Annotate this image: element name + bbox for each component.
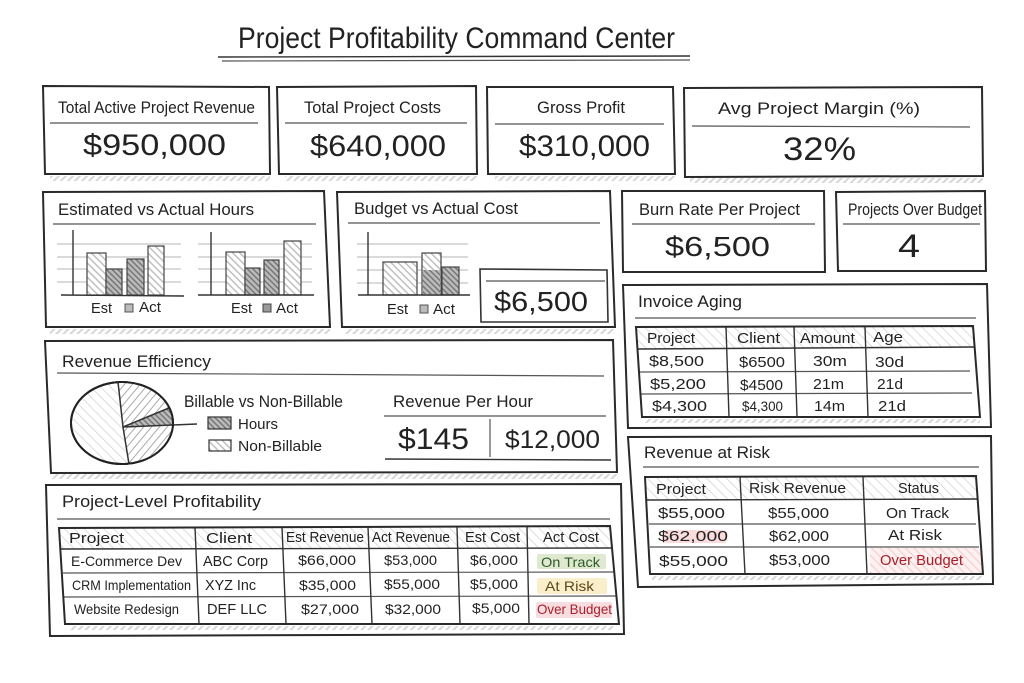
bar chart: budget: Est <box>387 301 409 318</box>
table: project profitability <box>59 526 619 630</box>
legend: Billable vs Non-Billable <box>184 392 343 411</box>
revenue per hour <box>384 392 611 460</box>
table: invoice aging: 30m <box>813 353 847 370</box>
table: invoice aging: Age <box>873 329 903 346</box>
table: project profitability: Project <box>69 530 125 547</box>
table: project profitability: $35,000 <box>299 577 356 593</box>
revenue per hour: Revenue Per Hour <box>393 392 533 411</box>
value: $6,500 <box>665 231 770 262</box>
table: project profitability: $6,000 <box>470 552 518 568</box>
table: revenue at risk: $55,000 <box>658 505 725 522</box>
table: invoice aging: $4500 <box>740 377 783 394</box>
panel: revenue efficiency <box>45 340 618 479</box>
table: invoice aging: 14m <box>814 398 845 415</box>
table: invoice aging <box>636 326 980 423</box>
table: invoice aging: $5,200 <box>650 376 706 393</box>
bar chart: budget: Act <box>433 301 456 318</box>
heading: Gross Profit <box>537 98 625 117</box>
table: project profitability: $66,000 <box>298 552 356 568</box>
heading: Project-Level Profitability <box>62 492 262 511</box>
table: invoice aging: $8,500 <box>649 353 704 370</box>
table: project profitability: Act Cost <box>543 529 600 546</box>
panel: invoice aging <box>623 284 991 428</box>
revenue per hour: $145 <box>398 423 469 456</box>
heading: Avg Project Margin (%) <box>718 99 920 118</box>
table: revenue at risk: $62,000 <box>769 528 829 545</box>
table: project profitability: E-Commerce Dev <box>71 553 182 569</box>
panel: estimated vs actual hours <box>43 191 330 334</box>
table: invoice aging: Project <box>647 330 696 347</box>
bar chart: hours left: Act <box>139 299 162 316</box>
panel: projects over budget <box>836 191 986 271</box>
table: project profitability: ABC Corp <box>203 553 268 570</box>
panel: average project margin <box>684 87 983 183</box>
title: Project Profitability Command Center <box>238 22 675 55</box>
table: revenue at risk: $55,000 <box>768 505 829 522</box>
bar chart: hours left <box>57 230 184 317</box>
legend: Hours <box>238 416 278 433</box>
heading: Invoice Aging <box>638 292 742 311</box>
table: project profitability: DEF LLC <box>207 601 267 618</box>
table: project profitability: Website Redesign <box>74 601 179 617</box>
table: revenue at risk: Status <box>898 480 939 497</box>
panel: revenue at risk <box>628 436 993 587</box>
table: invoice aging: Amount <box>800 330 856 347</box>
status badge: at risk <box>537 578 607 594</box>
table: revenue at risk: Project <box>656 481 707 498</box>
table: project profitability: $27,000 <box>301 601 359 617</box>
panel: total project costs <box>277 86 477 181</box>
heading: Revenue Efficiency <box>62 352 212 371</box>
panel: total active project revenue <box>43 86 270 181</box>
legend <box>184 392 343 455</box>
value: 4 <box>898 228 920 264</box>
table: invoice aging: 21d <box>877 376 903 393</box>
table: invoice aging: Client <box>737 330 781 347</box>
table: invoice aging: $4,300 <box>742 398 783 414</box>
table: invoice aging: $6500 <box>739 354 785 371</box>
value: $950,000 <box>83 129 226 162</box>
table: invoice aging: $4,300 <box>652 398 707 415</box>
table: project profitability: XYZ Inc <box>205 577 256 594</box>
value: 32% <box>783 131 856 167</box>
heading: Total Project Costs <box>304 98 441 117</box>
table: revenue at risk: At Risk <box>888 527 943 544</box>
bar chart: hours right <box>198 232 314 317</box>
status badge: over budget: Over Budget <box>537 601 612 617</box>
heading: Estimated vs Actual Hours <box>58 200 254 219</box>
table: invoice aging: 30d <box>875 354 904 371</box>
table: project profitability: $32,000 <box>385 601 441 617</box>
heading: Total Active Project Revenue <box>58 98 255 117</box>
table: project profitability: Est Cost <box>465 529 521 546</box>
table: revenue at risk <box>645 476 983 580</box>
callout: budget value: $6,500 <box>494 286 588 317</box>
table: revenue at risk: $53,000 <box>769 552 830 569</box>
table: project profitability: $5,000 <box>470 576 518 592</box>
table: project profitability: Client <box>206 530 253 547</box>
table: project profitability: Est Revenue <box>286 529 364 546</box>
panel: burn rate per project <box>622 191 825 272</box>
table: revenue at risk: Risk Revenue <box>749 480 846 497</box>
table: invoice aging: 21d <box>878 398 906 415</box>
table: revenue at risk: Over Budget <box>880 552 964 569</box>
bar chart: hours right: Act <box>276 300 299 317</box>
value: $310,000 <box>519 130 650 163</box>
table: revenue at risk: $55,000 <box>659 553 728 570</box>
table: project profitability: CRM Implementation <box>72 577 191 593</box>
table: invoice aging: 21m <box>813 376 844 393</box>
pie chart <box>71 382 197 464</box>
bar chart: hours left: Est <box>91 300 113 317</box>
callout: budget value <box>480 269 608 322</box>
status badge: at risk: At Risk <box>545 578 595 594</box>
panel: budget vs actual cost <box>337 191 615 334</box>
table: project profitability: $55,000 <box>384 576 440 592</box>
revenue per hour: $12,000 <box>505 426 600 454</box>
table: project profitability: Act Revenue <box>372 529 450 546</box>
heading: Projects Over Budget <box>848 200 982 219</box>
legend: Non-Billable <box>238 438 322 455</box>
bar chart: budget <box>357 232 470 318</box>
table: project profitability: $5,000 <box>472 600 520 616</box>
panel: project-level profitability <box>46 484 624 636</box>
heading: Budget vs Actual Cost <box>354 199 518 218</box>
table: revenue at risk: $62,000 <box>658 528 728 545</box>
status badge: on track: On Track <box>541 554 601 570</box>
heading: Burn Rate Per Project <box>639 200 800 219</box>
heading: Revenue at Risk <box>644 443 770 462</box>
table: project profitability: $53,000 <box>384 552 437 568</box>
table: revenue at risk: On Track <box>886 505 950 522</box>
value: $640,000 <box>310 130 446 163</box>
bar chart: hours right: Est <box>231 300 253 317</box>
panel: gross profit <box>487 87 675 181</box>
